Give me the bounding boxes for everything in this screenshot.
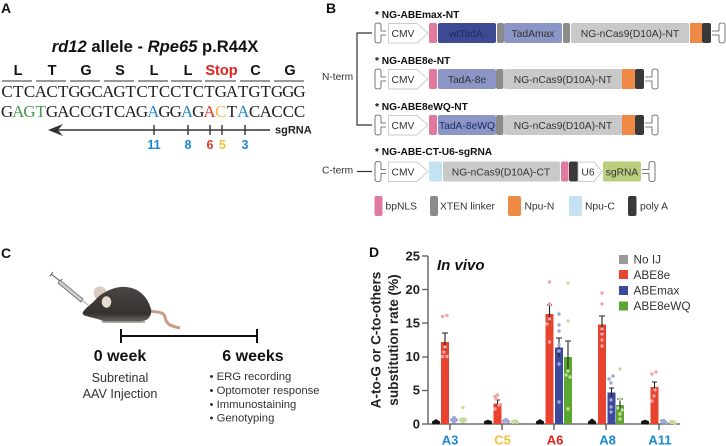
panel letter D: D (369, 244, 379, 260)
construct: NG-ABE8e-NT: TadA-8e (448, 75, 486, 86)
amino acid row: L (184, 63, 193, 79)
list of readouts: • ERG recording (210, 371, 291, 383)
text: subretinal injection: AAV Injection (83, 387, 157, 401)
position numbers: 3 (242, 138, 249, 152)
list of readouts: • Immunostaining (210, 399, 296, 411)
amino acid row: Stop (205, 63, 238, 79)
label: 6 weeks: 6 weeks (222, 348, 284, 365)
amino acid row: T (48, 63, 57, 79)
construct: NG-ABE-CT-U6-sgRNA: sgRNA (606, 167, 638, 178)
construct: NG-ABE-CT-U6-sgRNA: U6 (581, 167, 595, 178)
error bars (442, 305, 657, 411)
construct: NG-ABE8e-NT (375, 56, 658, 89)
construct: NG-ABE-CT-U6-sgRNA (375, 147, 655, 182)
axes (406, 248, 680, 432)
y axis title: A-to-G or C-to-others (368, 272, 384, 408)
amino acid row: S (115, 63, 125, 79)
construct: NG-ABE8e-NT: * NG-ABE8e-NT (375, 56, 451, 67)
text: subretinal injection (83, 371, 157, 401)
bottom DNA strand with highlighted bases: GAGTGACCGTCAGAGGAGACTACACCC (1, 102, 305, 121)
icon: mouse (83, 286, 180, 328)
position numbers: 5 (219, 138, 226, 152)
C-term label: C-term (322, 166, 353, 176)
position numbers: 8 (185, 138, 192, 152)
chart legend: ABE8e (634, 268, 671, 282)
pink ABE8e data points (441, 280, 658, 411)
construct: NG-ABEmax-NT: * NG-ABEmax-NT (375, 10, 460, 21)
black No IJ dots (432, 419, 649, 424)
list of readouts: • Genotyping (210, 412, 274, 424)
amino acid row: G (80, 63, 92, 79)
y axis title (368, 272, 401, 408)
construct: NG-ABE8e-NT: NG-nCas9(D10A)-NT (514, 75, 613, 86)
amino acid row (2, 63, 304, 81)
panel letter C: C (1, 245, 11, 261)
position numbers: 11 (147, 138, 161, 152)
green ABE8eWQ data points (459, 281, 677, 425)
construct: NG-ABE8eWQ-NT: CMV (392, 121, 415, 132)
N-term bracket (322, 33, 372, 125)
x axis category labels (442, 432, 672, 446)
panel letter A: A (1, 0, 11, 16)
construct: NG-ABEmax-NT: NG-nCas9(D10A)-NT (581, 29, 680, 40)
heading: rd12 allele: rd12 allele - Rpe65 p.R44X (52, 37, 258, 56)
panel letter B: B (326, 0, 336, 16)
chart legend: ABEmax (634, 284, 679, 298)
text: subretinal injection: Subretinal (92, 371, 148, 385)
C-term label (322, 166, 372, 176)
construct: NG-ABE8eWQ-NT: TadA-8eWQ (439, 121, 495, 132)
sgRNA arrow: sgRNA (275, 124, 312, 136)
axes: 15 (406, 316, 420, 330)
axes: 20 (406, 282, 420, 297)
axes: 5 (413, 382, 420, 398)
amino acid row: C (250, 63, 261, 79)
construct: NG-ABE8eWQ-NT: * NG-ABE8eWQ-NT (375, 102, 469, 113)
label: 0 week: 0 week (94, 348, 146, 365)
construct: NG-ABEmax-NT: TadAmax (512, 29, 555, 40)
bars (441, 314, 658, 424)
legend of construct parts (374, 196, 668, 216)
panel C: injection timeline (1, 245, 320, 424)
axes: 0 (413, 416, 420, 432)
position numbers (147, 138, 249, 152)
sgRNA arrow (48, 124, 312, 136)
axes: 25 (406, 248, 420, 264)
legend of construct parts: poly A (640, 202, 668, 212)
top DNA strand: CTCACTGGCAGTCTCCTCTGATGTGGG (1, 82, 306, 101)
construct: NG-ABE8eWQ-NT (375, 102, 658, 135)
amino acid row: L (150, 63, 159, 79)
panel A: rd12 allele sequence (1, 0, 312, 152)
construct: NG-ABE8eWQ-NT: NG-nCas9(D10A)-NT (514, 121, 613, 132)
construct: NG-ABE-CT-U6-sgRNA: * NG-ABE-CT-U6-sgRNA (375, 147, 493, 158)
construct: NG-ABE-CT-U6-sgRNA: NG-nCas9(D10A)-CT (452, 167, 551, 178)
list of readouts (210, 371, 320, 424)
chart legend: No IJ (634, 252, 661, 266)
chart title: In vivo (437, 257, 485, 274)
blue ABEmax data points (450, 312, 668, 424)
legend of construct parts: Npu-N (524, 202, 554, 212)
position numbers: 6 (207, 138, 214, 152)
panel B: constructs (322, 0, 725, 216)
N-term bracket: N-term (322, 72, 353, 83)
construct: NG-ABE8e-NT: CMV (392, 75, 415, 86)
icon: syringe (50, 272, 88, 305)
y axis title: substitution rate (%) (386, 274, 401, 406)
panel D: bar chart (368, 244, 691, 446)
amino acid row: G (284, 63, 296, 79)
construct: NG-ABE-CT-U6-sgRNA: CMV (392, 167, 415, 178)
construct: NG-ABEmax-NT (375, 10, 725, 43)
construct: NG-ABEmax-NT: CMV (392, 29, 415, 40)
axes: 10 (406, 349, 420, 364)
legend of construct parts: XTEN linker (440, 202, 495, 212)
legend of construct parts: Npu-C (585, 202, 615, 212)
construct: NG-ABEmax-NT: wtTadA (448, 29, 483, 40)
timeline bar (121, 329, 257, 343)
chart legend (619, 252, 691, 313)
list of readouts: • Optomoter response (210, 385, 320, 397)
legend of construct parts: bpNLS (386, 202, 417, 212)
amino acid row: L (14, 63, 23, 79)
chart legend: ABE8eWQ (634, 299, 691, 313)
